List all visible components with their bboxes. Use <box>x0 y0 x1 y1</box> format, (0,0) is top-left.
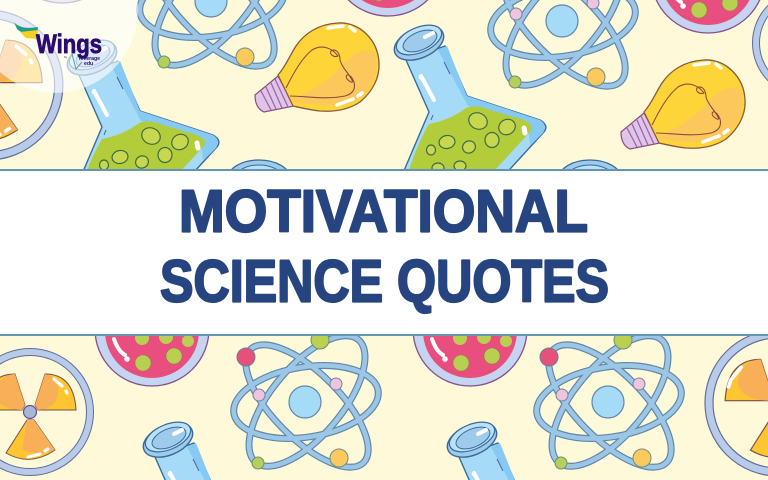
logo wordmark: Wings <box>36 29 102 59</box>
icon: bottom atom left <box>227 317 387 480</box>
logo byline: leverage <box>79 56 100 62</box>
title line 2: SCIENCE QUOTES <box>160 248 609 314</box>
logo: Wings by leverage edu <box>0 0 138 93</box>
icon: top-right radiation ring <box>756 0 768 93</box>
icon: top-left petri dish <box>5 0 119 3</box>
icon: bottom flask right <box>442 416 599 480</box>
logo backdrop <box>0 0 138 93</box>
icon: light bulb right <box>621 60 745 149</box>
icon: rim above band left <box>228 160 290 196</box>
icon: flask left <box>62 34 219 195</box>
icon: bottom atom right <box>530 317 690 480</box>
title <box>160 178 609 314</box>
icon: top atom right <box>484 0 644 105</box>
logo byline: edu <box>84 61 93 67</box>
title line 1: MOTIVATIONAL <box>179 178 588 244</box>
icon: bottom-right radiation symbol <box>709 334 768 472</box>
logo byline: by <box>64 55 68 59</box>
title band <box>0 170 768 335</box>
logo byline <box>64 54 100 69</box>
icon: bottom-left radiation symbol <box>0 352 90 472</box>
icon: top-right petri dish <box>651 0 765 33</box>
icon: top-left radiation symbol <box>0 14 59 156</box>
icon: bottom flask left <box>138 416 295 480</box>
icon: top atom left <box>133 0 293 85</box>
icon: rim above band right <box>559 160 621 196</box>
icon: bottom-left petri dish <box>95 272 209 386</box>
icon: bottom-middle petri dish <box>413 272 527 386</box>
logo swoosh <box>14 22 38 39</box>
icon: light bulb left <box>255 23 379 112</box>
icon: flask right <box>389 19 546 180</box>
icon: top-middle petri dish <box>331 0 445 16</box>
